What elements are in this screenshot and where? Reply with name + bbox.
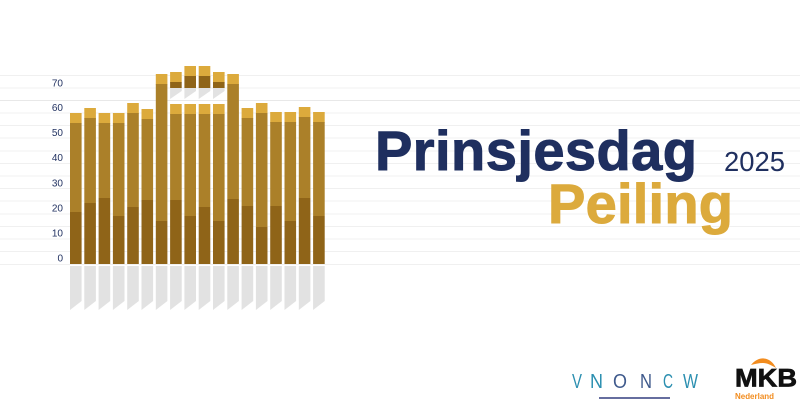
logo: VNO NCW: O	[613, 370, 627, 393]
y-axis labels: 60	[52, 103, 63, 114]
y-axis labels: 70	[52, 78, 63, 90]
logo: VNO NCW	[572, 370, 698, 399]
bars	[70, 66, 325, 264]
y-axis labels: 20	[52, 204, 63, 214]
logo: VNO NCW: N	[590, 370, 603, 393]
logo: VNO NCW: N	[640, 370, 652, 393]
y-axis labels: 10	[52, 228, 63, 240]
y-axis labels: 50	[52, 128, 63, 139]
y-axis labels: 40	[52, 153, 63, 164]
title: Peiling: Peiling	[548, 172, 733, 235]
title: Prinsjesdag: Prinsjesdag	[375, 119, 697, 182]
logo: MKB Nederland	[735, 358, 797, 400]
y-axis labels: 30	[52, 178, 63, 190]
logo: VNO NCW: V	[572, 370, 582, 393]
stacked bar chart	[70, 66, 325, 310]
logo: VNO NCW: C	[663, 370, 673, 393]
reflections below baseline	[70, 88, 325, 310]
year: 2025: 2025	[724, 146, 785, 177]
y-axis labels	[52, 78, 63, 264]
y-axis labels: 0	[57, 254, 63, 264]
logo: VNO NCW: W	[683, 370, 698, 393]
logo: MKB Nederland: MKB	[735, 364, 797, 392]
